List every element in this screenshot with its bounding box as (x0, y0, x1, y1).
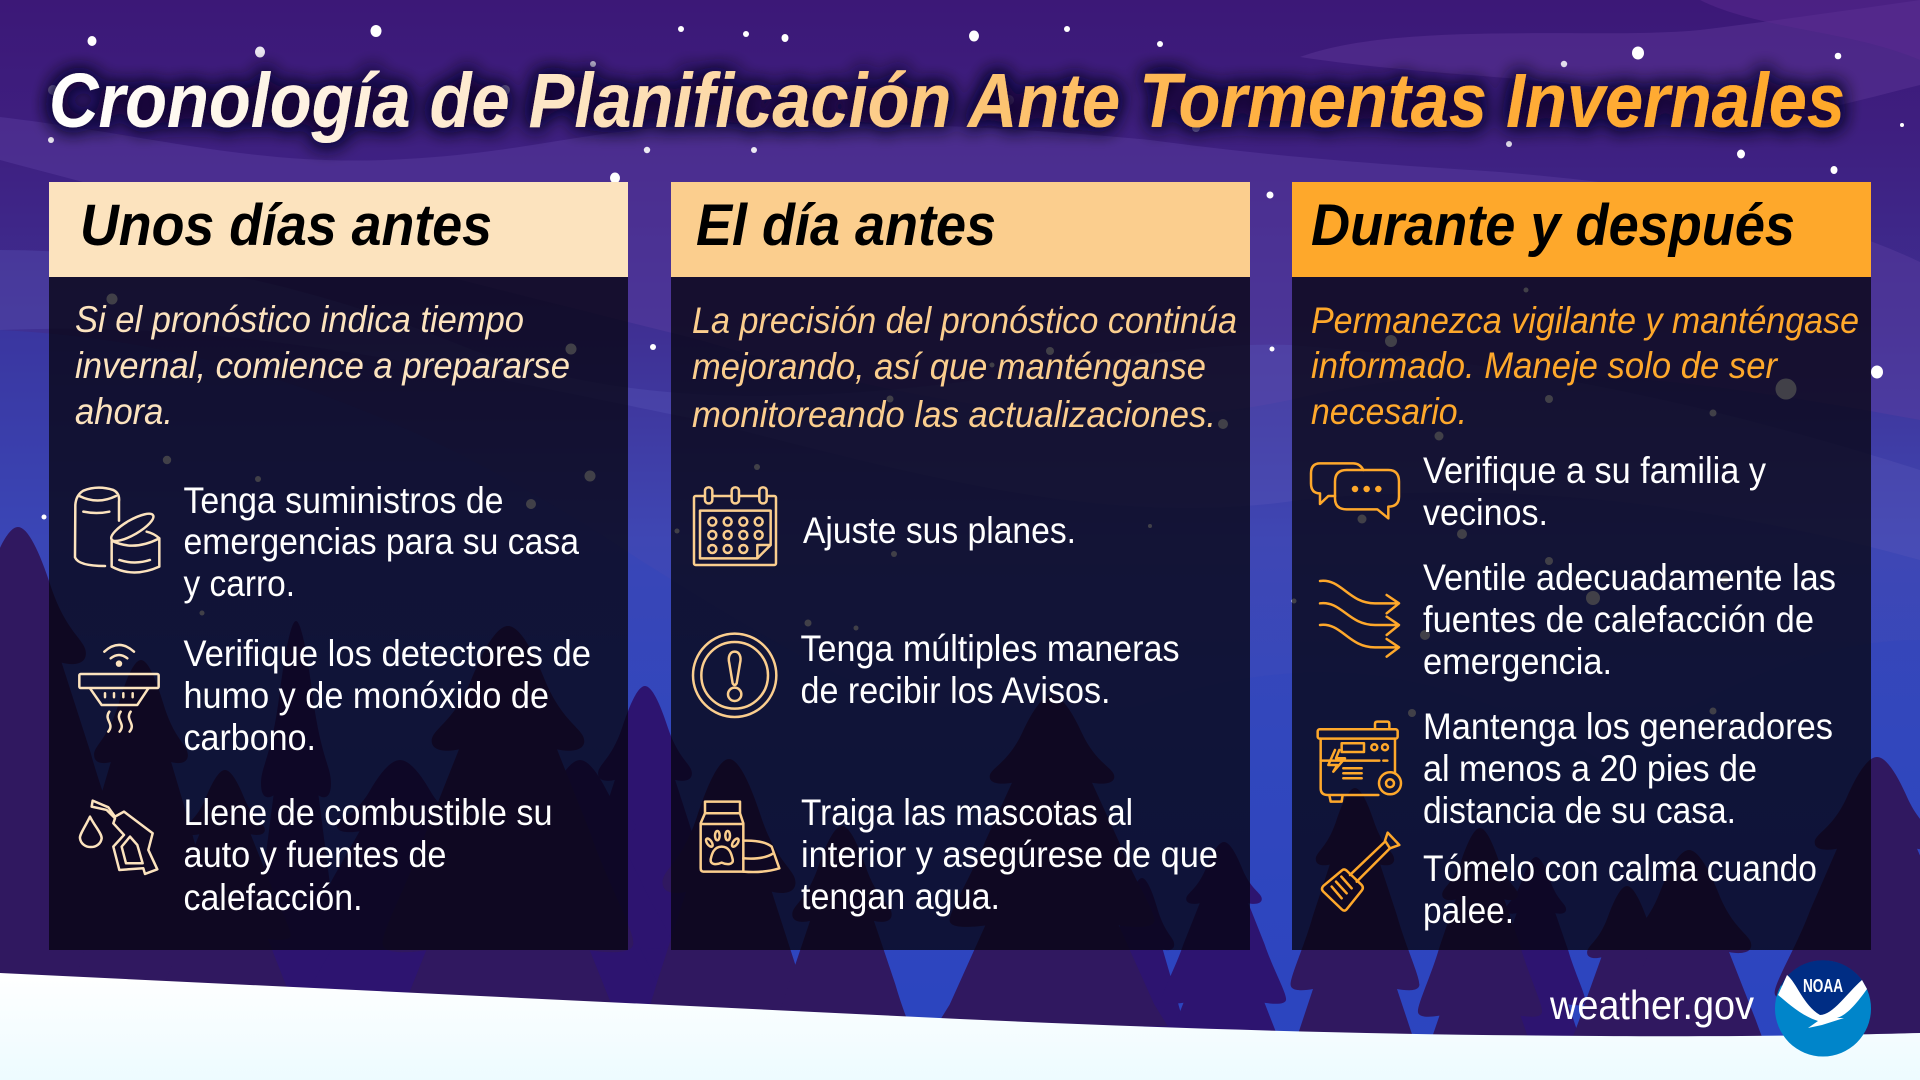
intro text (75, 299, 570, 432)
item text: ventile (1423, 557, 1836, 682)
item text: familia (1423, 450, 1766, 533)
icon: wind arrows (1320, 581, 1399, 657)
item text: familia: Verifique a su familia y (1423, 450, 1766, 491)
intro text: necesario. (1311, 391, 1467, 432)
icon: snow shovel (1322, 833, 1399, 911)
icon: cans (75, 488, 159, 572)
intro text: Si el pronóstico indica tiempo (75, 299, 524, 340)
item text: ventile: fuentes de calefacción de (1423, 599, 1814, 640)
snow ground (0, 973, 1920, 1080)
intro text: ahora. (75, 391, 173, 432)
item text: detectores: humo y de monóxido de (184, 675, 549, 716)
icon: NOAA logo: NOAA (1803, 976, 1843, 996)
item text: suministros: emergencias para su casa (184, 521, 579, 562)
panel header (671, 182, 1250, 277)
item text: generadores: al menos a 20 pies de (1423, 748, 1757, 789)
item text: combustible: Llene de combustible su (184, 792, 552, 833)
item text: generadores: distancia de su casa. (1423, 790, 1736, 831)
item text: detectores: Verifique los detectores de (184, 633, 591, 674)
panel header (49, 182, 628, 277)
item text: mascotas: Traiga las mascotas al (801, 792, 1133, 833)
panel header: El día antes (696, 193, 996, 258)
icon: smoke detector (79, 645, 159, 732)
panel: el día antes (671, 182, 1250, 950)
item text: mascotas: tengan agua. (801, 876, 1000, 917)
icon: pet food and bowl (701, 802, 779, 872)
item text: familia: vecinos. (1423, 492, 1548, 533)
icon: fuel nozzle (80, 801, 157, 874)
item text: palear: palee. (1423, 890, 1514, 931)
website label: weather.gov (1549, 982, 1754, 1028)
intro text: informado. Maneje solo de ser (1311, 345, 1779, 386)
item text: avisos: Tenga múltiples maneras (800, 628, 1180, 669)
item text: palear: Tómelo con calma cuando (1423, 848, 1817, 889)
background: pine tree silhouettes (0, 527, 1920, 1079)
panel header (1292, 182, 1871, 277)
item text: generadores (1423, 706, 1833, 831)
item text: mascotas: interior y asegúrese de que (801, 834, 1218, 875)
panel header: Unos días antes (80, 193, 492, 258)
intro text (1311, 300, 1859, 432)
item text: mascotas (801, 792, 1218, 917)
panel body (49, 277, 628, 950)
item text: suministros: y carro. (184, 563, 295, 604)
icon: chat bubbles (1311, 463, 1399, 518)
panel: durante y después (1292, 182, 1871, 950)
item text: avisos: de recibir los Avisos. (800, 670, 1110, 711)
item text: suministros (184, 480, 579, 604)
item text: detectores: carbono. (184, 717, 316, 758)
intro text: invernal, comience a prepararse (75, 345, 570, 386)
intro text: mejorando, así que manténganse (692, 346, 1206, 387)
item text: combustible: auto y fuentes de (184, 834, 446, 875)
panel body (1292, 277, 1871, 950)
panel body (671, 277, 1250, 950)
item text: suministros: Tenga suministros de (184, 480, 504, 521)
icon: calendar (694, 487, 776, 565)
item text: ventile: emergencia. (1423, 641, 1612, 682)
item text: avisos (800, 628, 1180, 711)
item text: generadores: Mantenga los generadores (1423, 706, 1833, 747)
icon: NOAA logo (1775, 960, 1871, 1056)
intro text (692, 300, 1237, 435)
item text: combustible: calefacción. (184, 877, 362, 918)
item text: planes: Ajuste sus planes. (803, 510, 1076, 551)
item text: ventile: Ventile adecuadamente las (1423, 557, 1836, 598)
item text: detectores (184, 633, 591, 758)
panel header: Durante y después (1311, 193, 1795, 258)
icon: alert (693, 634, 776, 717)
background: stars (42, 25, 1904, 717)
item text: combustible (184, 792, 552, 918)
intro text: La precisión del pronóstico continúa (692, 300, 1237, 341)
icon: generator (1318, 722, 1401, 802)
item text: palear (1423, 848, 1817, 931)
intro text: Permanezca vigilante y manténgase (1311, 300, 1859, 341)
intro text: monitoreando las actualizaciones. (692, 394, 1216, 435)
panel: unos días antes (49, 182, 628, 950)
